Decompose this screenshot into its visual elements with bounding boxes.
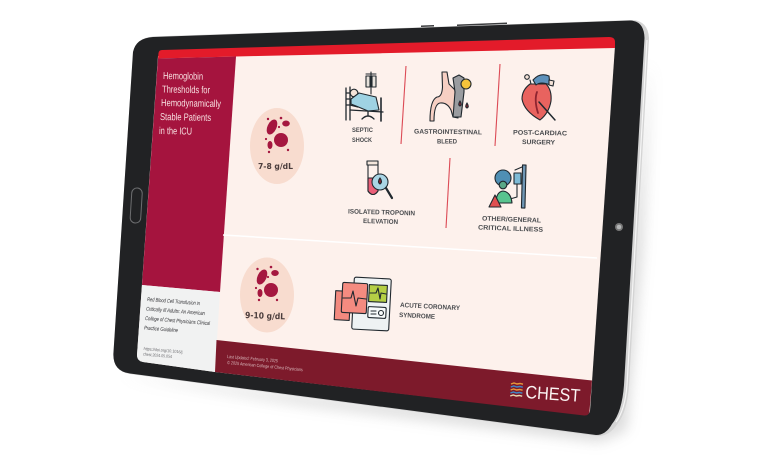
citation DOI: chest.2024.05.054 (143, 352, 173, 359)
icon: front camera (615, 223, 623, 231)
label: POST-CARDIAC (513, 130, 567, 137)
label (352, 127, 373, 144)
title: in the ICU (159, 126, 192, 138)
dose label: 7-8 g/dL (258, 162, 293, 171)
icon: stomach (430, 72, 471, 121)
panel: 7-8 g/dL badge (250, 108, 304, 184)
silver edge highlight (616, 40, 647, 422)
footer text (227, 354, 304, 372)
tablet device (113, 20, 649, 436)
citation title: College of Chest Physicians Clinical (145, 316, 211, 327)
label: GASTROINTESTINAL (414, 129, 482, 136)
label: ELEVATION (363, 218, 398, 226)
citation DOI (143, 346, 184, 359)
septic shock item (346, 72, 383, 144)
title: Hemodynamically (161, 98, 221, 110)
label: SYNDROME (399, 312, 436, 321)
footer text: Last Updated: February 3, 2025 (227, 354, 278, 363)
icon: home button (130, 188, 143, 223)
panel: 9-10 g/dL badge (240, 258, 294, 332)
citation title: Red Blood Cell Transfusion in (147, 297, 200, 307)
label: ISOLATED TROPONIN (348, 209, 415, 217)
title: Hemoglobin (163, 71, 203, 83)
panel: citation (137, 285, 220, 372)
label (399, 302, 461, 321)
acute coronary syndrome item (334, 277, 461, 331)
panel: footer (215, 340, 592, 416)
label: SHOCK (352, 137, 372, 144)
gastrointestinal bleed item (414, 72, 482, 146)
icon: hospital bed (346, 72, 383, 121)
label: SURGERY (522, 139, 556, 147)
label: OTHER/GENERAL (482, 216, 541, 225)
label: ACUTE CORONARY (400, 302, 461, 312)
tablet drop shadow (118, 60, 650, 441)
other/general critical illness item (478, 165, 544, 234)
screen background (137, 46, 615, 415)
isolated troponin elevation item (348, 161, 415, 226)
panel: title sidebar (142, 56, 236, 292)
label: CRITICAL ILLNESS (478, 225, 544, 234)
icon: monitors with ECG (334, 277, 391, 331)
title (159, 71, 221, 138)
icon: heart (522, 75, 555, 120)
top buttons (421, 22, 507, 27)
citation DOI: https://doi.org/10.1016/j. (143, 346, 184, 355)
title: Stable Patients (160, 112, 211, 124)
red dividers (401, 64, 500, 228)
label (414, 129, 482, 146)
post-cardiac surgery item (513, 75, 567, 147)
label: BLEED (437, 138, 457, 146)
citation title (144, 297, 211, 334)
citation title: Critically Ill Adults: An American (146, 307, 205, 317)
tablet bezel (113, 20, 644, 435)
dose label: 9-10 g/dL (245, 311, 286, 322)
icon: blood cells (255, 266, 279, 301)
footer text: © 2025 American College of Chest Physicians (227, 359, 304, 372)
label (513, 130, 567, 147)
tablet silver edge (113, 20, 649, 436)
citation title: Practice Guideline (144, 326, 178, 334)
icon: blood cells (265, 117, 290, 153)
label (478, 216, 544, 234)
icon: logo stripes (510, 383, 523, 396)
CHEST logo: CHEST (525, 382, 581, 406)
red top band (158, 37, 615, 58)
section divider (223, 235, 597, 258)
icon: test tube and magnifier (367, 161, 392, 198)
icon: patient with oxygen mask (489, 165, 526, 208)
label (348, 209, 415, 226)
title: Thresholds for (162, 85, 211, 96)
label: SEPTIC (352, 127, 373, 134)
